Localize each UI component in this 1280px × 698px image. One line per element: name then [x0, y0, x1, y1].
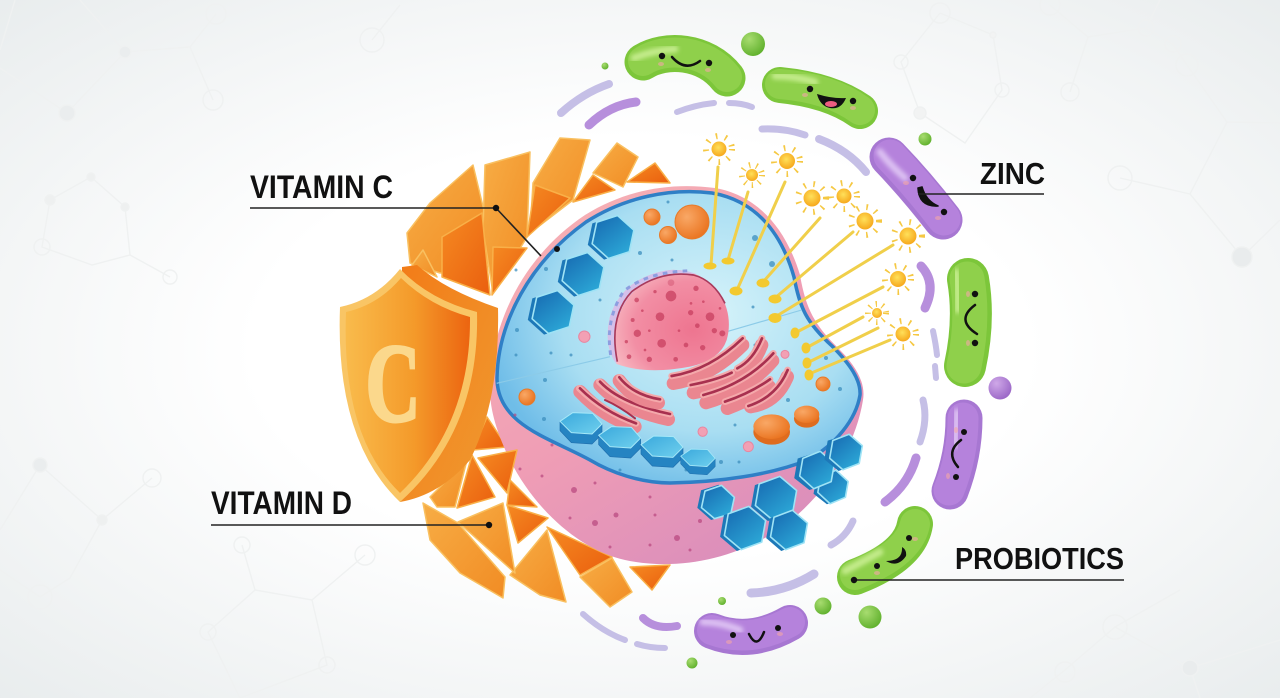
cross-section seam	[497, 310, 802, 383]
bacterium: green right	[956, 272, 978, 366]
cell body	[490, 186, 863, 564]
label: Vitamin C: VITAMIN C	[250, 169, 393, 205]
cytoplasm dots	[514, 200, 842, 472]
label: Vitamin D	[211, 485, 492, 528]
shards behind the cell: vitamin C upper cluster	[407, 138, 670, 293]
body pores	[514, 414, 702, 552]
flat hexagon row	[560, 413, 715, 475]
label: Zinc: ZINC	[980, 156, 1045, 191]
orange organelles	[519, 205, 830, 405]
beam feet	[704, 258, 814, 380]
sun rays with beams	[704, 136, 922, 380]
shield face	[340, 269, 477, 502]
label: Vitamin C	[250, 169, 560, 256]
upper hexagons	[526, 211, 636, 339]
left golgi stack	[579, 377, 670, 427]
letter C: C	[365, 322, 421, 446]
suns	[706, 136, 922, 347]
orange discs	[753, 406, 819, 445]
membrane arc fragments	[561, 84, 937, 648]
floating spheres	[602, 32, 1012, 668]
shards behind the cell: vitamin D lower cluster	[423, 417, 670, 607]
organelles central group	[497, 270, 819, 475]
label: Zinc	[918, 156, 1045, 194]
shield side	[400, 265, 498, 502]
nucleus	[608, 270, 729, 370]
shield with letter C	[340, 265, 498, 502]
label: Probiotics	[851, 541, 1124, 583]
shards in front of the cell: upper	[442, 213, 527, 295]
shards in front of the cell: lower	[430, 450, 548, 573]
cell	[490, 186, 864, 564]
beams	[711, 167, 893, 374]
label: Vitamin D: VITAMIN D	[211, 485, 352, 521]
label: Probiotics: PROBIOTICS	[955, 541, 1124, 576]
hexagon cluster on body	[695, 431, 864, 555]
pink vesicles	[579, 331, 789, 452]
right golgi stack	[672, 338, 788, 408]
cell top surface	[497, 192, 860, 483]
bacterium: green probiotics	[845, 524, 918, 577]
bacterium: purple right	[946, 412, 967, 491]
bacterium: purple zinc	[880, 152, 947, 220]
bacterium: green top left	[634, 49, 727, 78]
bacterium: purple bottom	[703, 622, 790, 644]
bacterium: green top right	[775, 76, 860, 111]
